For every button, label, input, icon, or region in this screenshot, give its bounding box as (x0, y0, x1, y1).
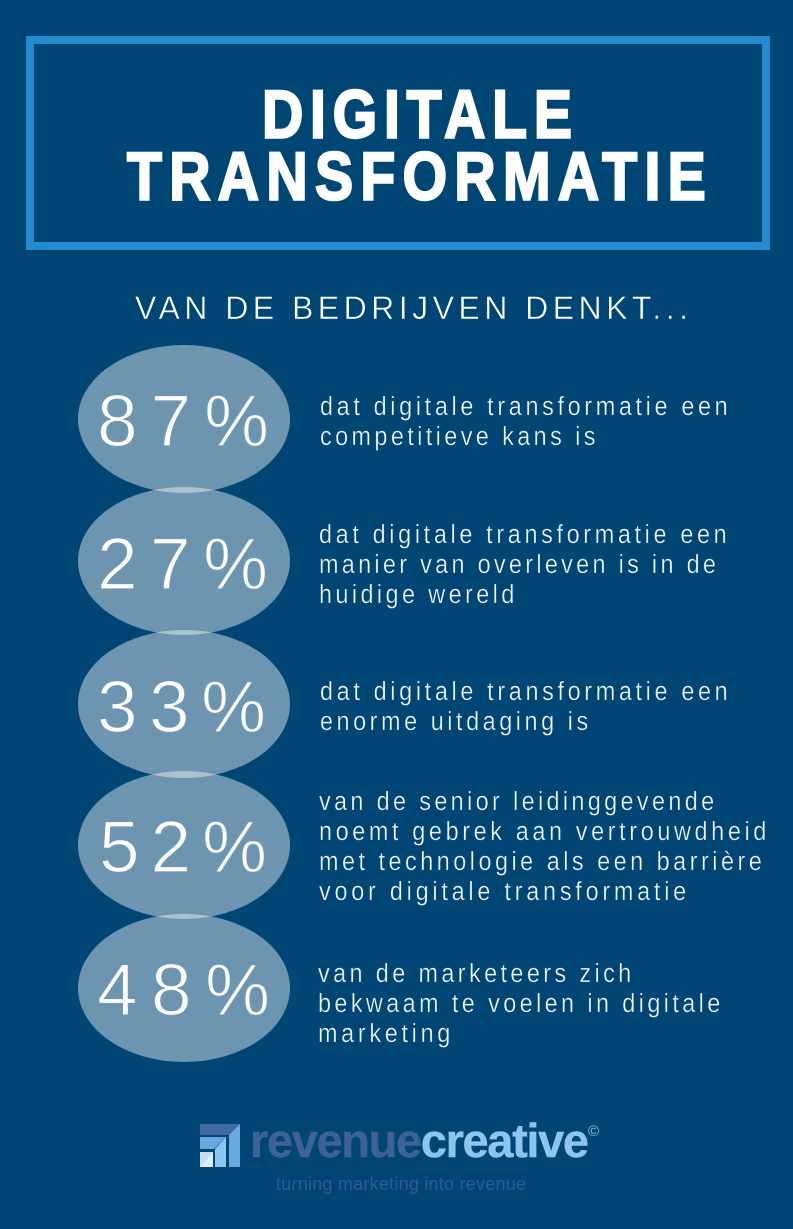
description 33%: dat digitale transformatie een (320, 678, 728, 706)
ellipses (78, 345, 290, 1062)
description 33%: enorme uitdaging is (320, 708, 588, 736)
description 52%: van de senior leidinggevende (319, 788, 714, 816)
description 52%: voor digitale transformatie (319, 878, 686, 906)
stat 48%: 48% (97, 950, 270, 1031)
logo wordmark: revenuecreative (250, 1114, 589, 1167)
title line 1: DIGITALE (262, 77, 572, 153)
description 87%: dat digitale transformatie een (320, 393, 728, 421)
stat 48% (97, 950, 720, 1048)
description 52% (319, 788, 766, 906)
description 48%: van de marketeers zich (318, 960, 631, 988)
title box (30, 40, 766, 246)
copyright mark: © (588, 1123, 599, 1140)
description 33% (320, 678, 728, 736)
icon: rising bars (200, 1124, 240, 1167)
description 48%: marketing (318, 1020, 450, 1048)
stat 52% (99, 788, 766, 906)
description 27% (319, 521, 727, 609)
stat 27% (97, 521, 727, 609)
stat 52%: 52% (99, 807, 267, 888)
stat 87% (97, 381, 728, 462)
description 27%: dat digitale transformatie een (319, 521, 727, 549)
tagline: turning marketing into revenue (276, 1174, 526, 1194)
stat 33%: 33% (97, 667, 266, 748)
title line 2: TRANSFORMATIE (127, 139, 706, 215)
stat 33% (97, 667, 728, 748)
description 48%: bekwaam te voelen in digitale (318, 990, 720, 1018)
description 52%: met technologie als een barrière (319, 848, 762, 876)
description 27%: manier van overleven is in de (319, 551, 716, 579)
description 87%: competitieve kans is (320, 423, 595, 451)
description 48% (318, 960, 720, 1048)
description 87% (320, 393, 728, 451)
logo (200, 1114, 599, 1194)
description 27%: huidige wereld (319, 581, 514, 609)
stat 87%: 87% (97, 381, 269, 462)
description 52%: noemt gebrek aan vertrouwdheid (319, 818, 766, 846)
subheading: VAN DE BEDRIJVEN DENKT... (135, 290, 688, 326)
stat 27%: 27% (97, 524, 268, 605)
